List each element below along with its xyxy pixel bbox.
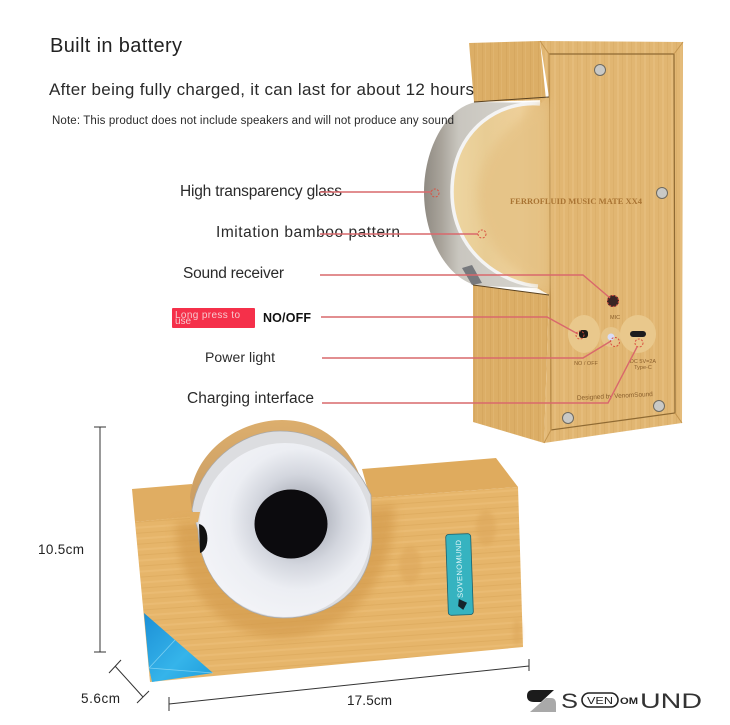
dark hole at left edge — [199, 524, 207, 553]
side face bottom — [473, 285, 549, 443]
left wood notch — [190, 512, 200, 524]
engraved port labels: MIC — [610, 315, 620, 321]
note: Note: This product does not include speakers and will not produce any sound — [52, 115, 454, 127]
callout: charging interface: Charging interface — [187, 390, 314, 407]
callout: charging interface — [187, 339, 643, 407]
logo: sovenomund: OM — [620, 696, 638, 706]
top surface left — [132, 484, 197, 522]
callout: power light — [205, 338, 620, 365]
callout: on/off switch: Long press to — [175, 310, 240, 321]
callout: on/off switch: use — [175, 316, 192, 327]
front face of device — [537, 41, 683, 443]
microphone hole — [607, 295, 619, 307]
dimension: width — [169, 659, 529, 711]
white disc — [199, 443, 371, 617]
screws — [562, 64, 668, 424]
dimension: width: 17.5cm — [347, 693, 392, 708]
callout: sound receiver — [183, 265, 618, 306]
engraved port labels: Designed by VenomSound — [577, 391, 653, 402]
callout: imitation bamboo pattern: Imitation bamboo pattern — [216, 224, 400, 241]
red long press tag — [172, 308, 255, 328]
callout: imitation bamboo pattern — [216, 224, 486, 241]
disc shadow on body — [176, 505, 394, 638]
callout: on/off switch — [172, 308, 584, 339]
engraved port labels — [574, 315, 656, 402]
logo: sovenomund — [527, 690, 702, 713]
dimension: height — [38, 427, 106, 652]
heading: built in battery: Built in battery — [50, 35, 182, 57]
engraved port labels: DC 5V=2A — [630, 359, 656, 365]
engraved port labels: Type-C — [634, 365, 652, 371]
logo wordmark: S — [561, 690, 578, 713]
device: back view — [424, 41, 683, 443]
glass rim — [192, 431, 372, 618]
engraved product name: FERROFLUID MUSIC MATE XX4 — [510, 196, 643, 206]
teal brand badge: SOVENOMUND — [454, 539, 465, 598]
description: charge time: After being fully charged, it can last for about 12 hours — [49, 80, 474, 99]
black ferrofluid — [254, 490, 328, 558]
dimension: depth — [81, 660, 149, 706]
callout: power light: Power light — [205, 349, 275, 365]
callout: high transparency glass: High transparency glass — [180, 183, 342, 200]
wooden body — [135, 487, 523, 682]
power button recess — [568, 315, 600, 353]
power light — [601, 327, 621, 347]
teal brand badge — [446, 534, 473, 615]
half disc: glass and bamboo — [424, 97, 549, 295]
dimension: depth: 5.6cm — [81, 691, 120, 706]
callout: high transparency glass — [180, 183, 439, 200]
side face top — [469, 41, 546, 102]
logo: sovenomund: VEN — [587, 696, 613, 707]
device: front view — [132, 420, 523, 682]
logo mark — [527, 690, 554, 702]
logo: sovenomund: UND — [640, 690, 702, 713]
engraved port labels: NO / OFF — [574, 361, 599, 367]
dimension: height: 10.5cm — [38, 542, 84, 557]
callout: sound receiver: Sound receiver — [183, 265, 284, 282]
callout: on/off switch: NO/OFF — [263, 311, 311, 325]
top surface right — [362, 458, 518, 498]
usb-c port recess — [620, 315, 656, 353]
wooden dome — [190, 420, 371, 510]
blue ferrofluid corner — [144, 613, 213, 682]
bamboo node marks — [399, 510, 521, 645]
